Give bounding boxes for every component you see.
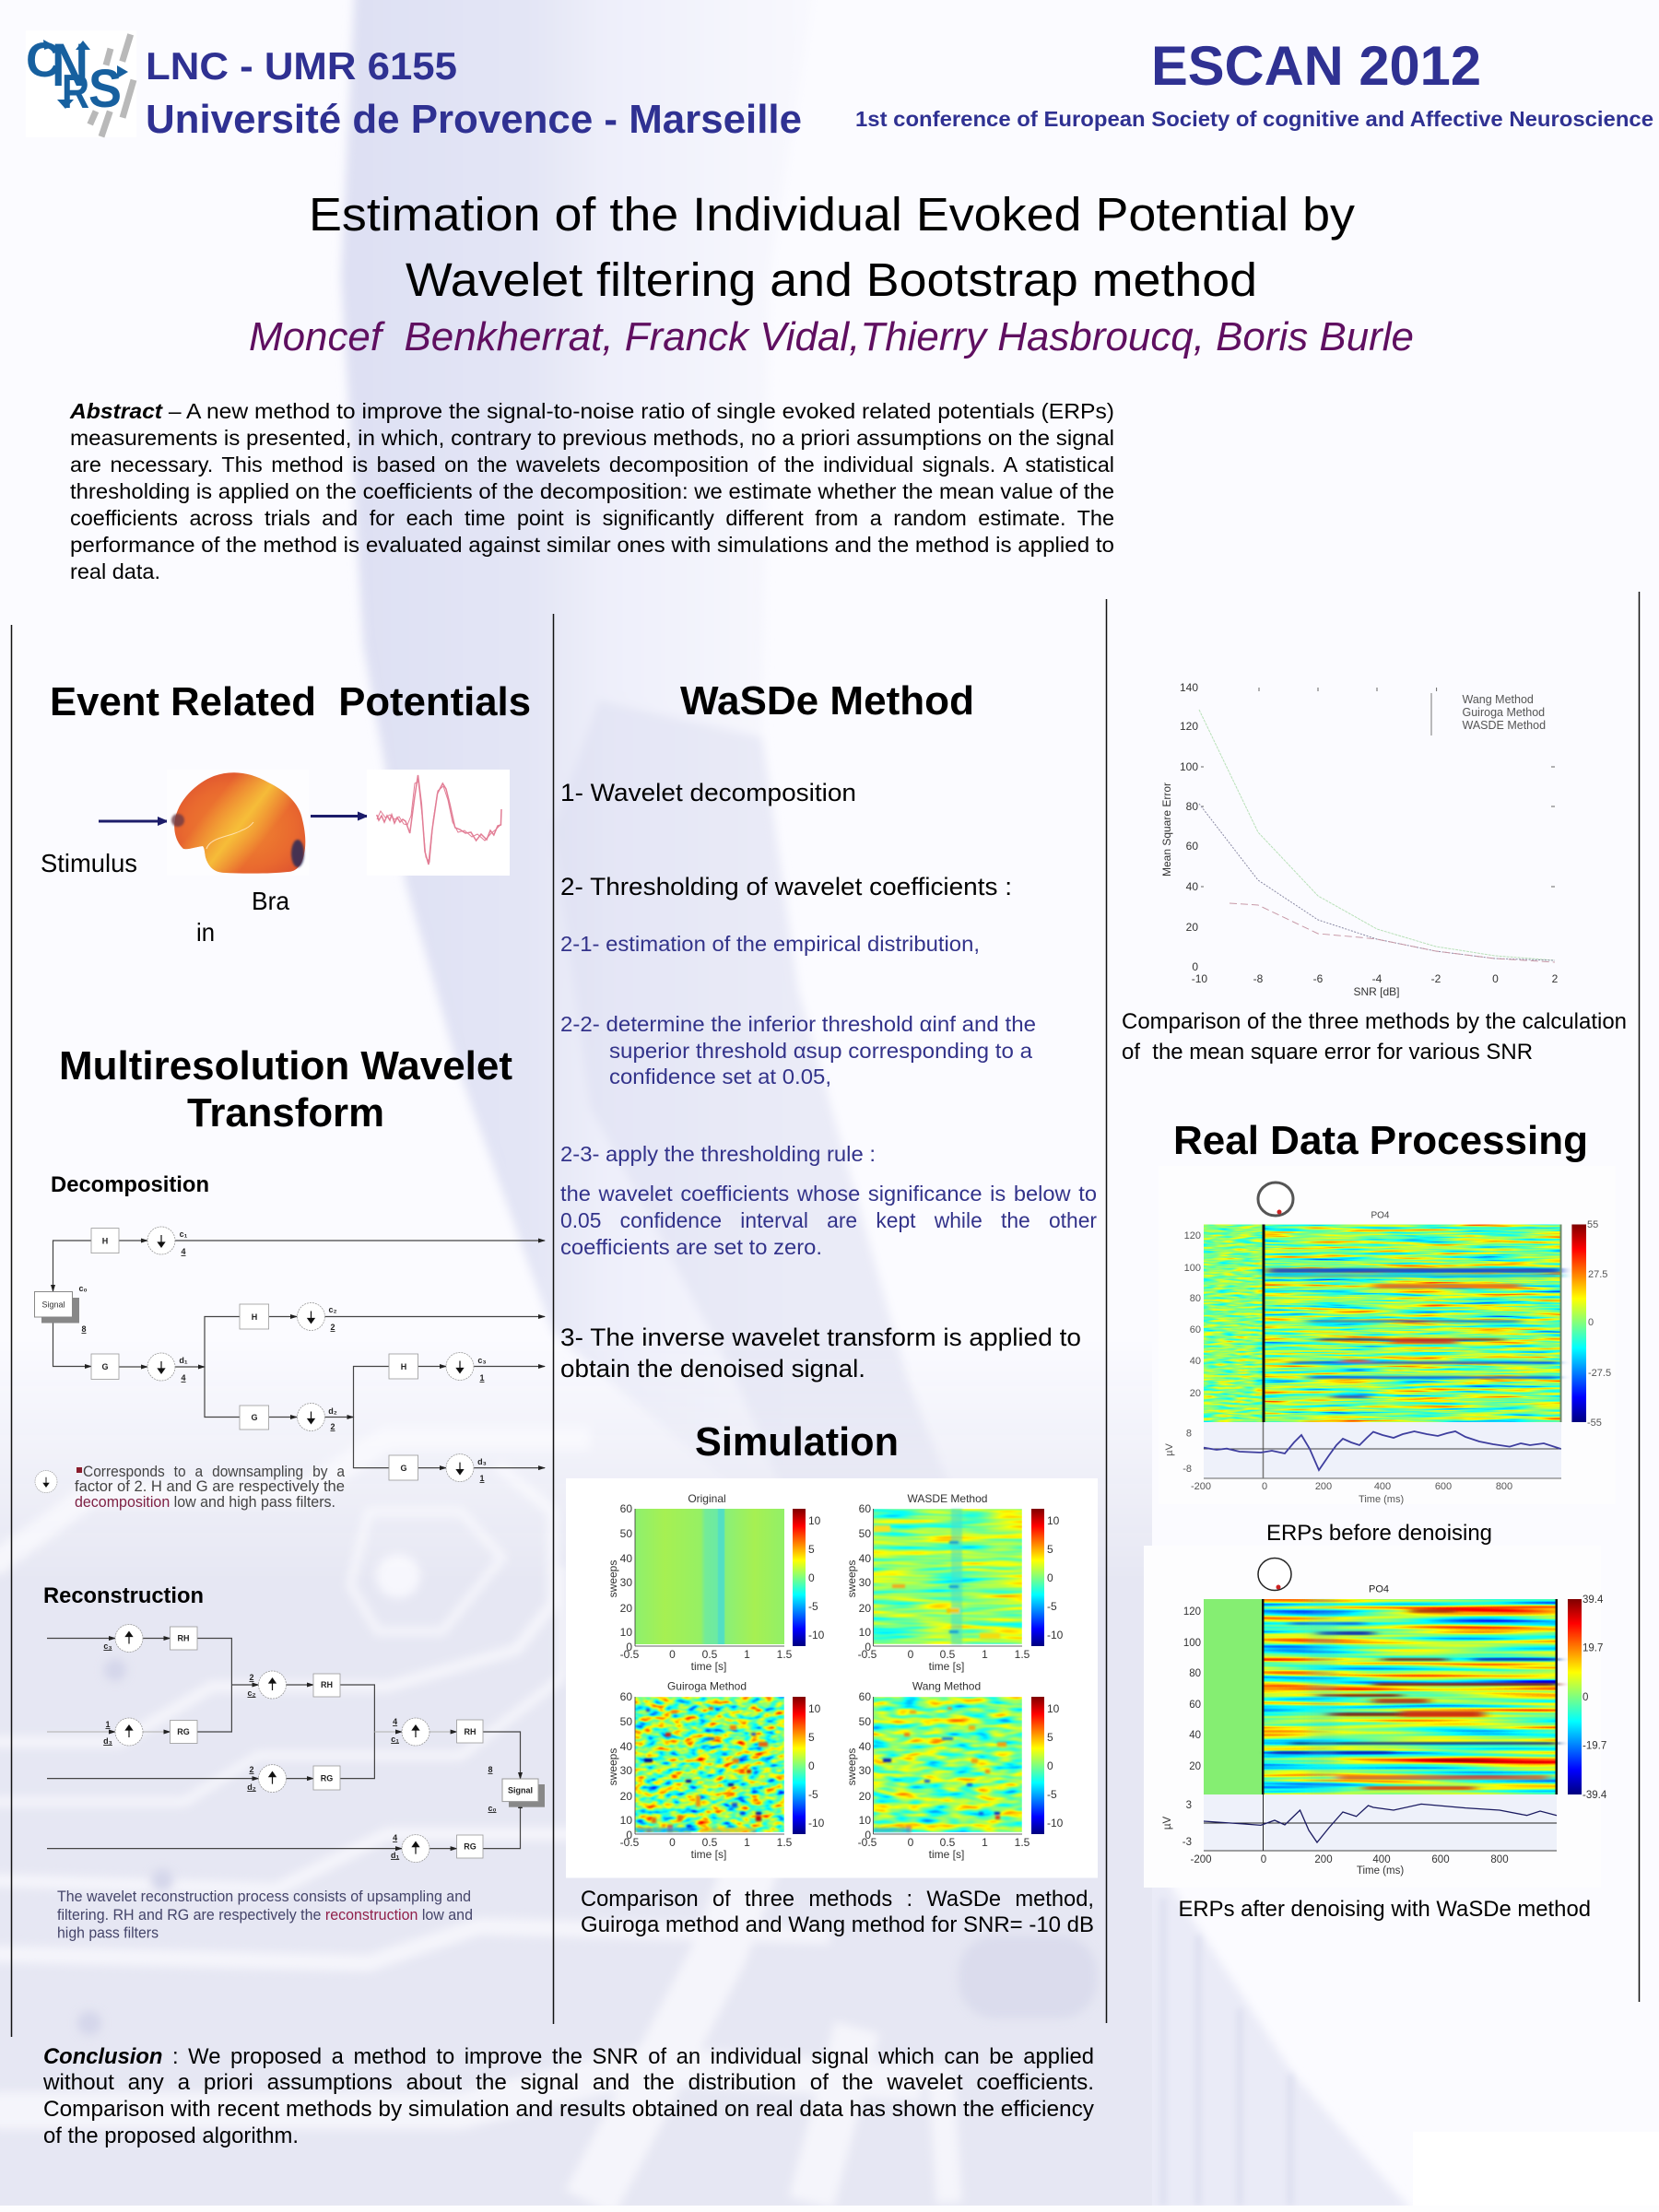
heatmap: guiroga method: 0 <box>626 1829 632 1841</box>
figure: ERPs after denoising: 200 <box>1314 1854 1333 1865</box>
header: CNRS logo: S <box>88 59 122 119</box>
figure: ERPs before denoising: 200 <box>1315 1481 1332 1492</box>
step 2-2: confidence set at 0.05, <box>609 1065 831 1088</box>
heatmap: wasde method: 50 <box>859 1527 871 1540</box>
heatmap: original: 0 <box>626 1641 632 1653</box>
label: stimulus: Stimulus <box>41 849 137 877</box>
conclusion: Conclusion : We proposed a method to improve the SNR of an individual signal which can be applied <box>43 2044 1094 2069</box>
heatmap: original: 0 <box>808 1571 815 1584</box>
diagram: wavelet reconstruction <box>47 1624 545 1863</box>
figure: ERPs before denoising: 600 <box>1435 1481 1452 1492</box>
heatmap: original: -5 <box>808 1600 818 1613</box>
heatmap: original: 60 <box>620 1502 632 1515</box>
figure: ERPs before denoising: 20 <box>1190 1388 1201 1399</box>
figure: ERPs before denoising: 55 <box>1587 1219 1598 1230</box>
heatmap: guiroga method: 10 <box>808 1702 821 1715</box>
diagram: wavelet decomposition: d₃ <box>477 1457 487 1466</box>
figure: ERPs before denoising <box>1159 1166 1616 1505</box>
heatmap: wasde method: time [s] <box>929 1660 964 1673</box>
diagram: wavelet decomposition: d₂ <box>328 1406 337 1416</box>
step 2-3: coefficients are set to zero. <box>560 1235 822 1259</box>
header: CNRS logo: N <box>52 30 88 99</box>
heatmap: original: -10 <box>808 1629 825 1641</box>
diagram: wavelet decomposition: 2 <box>330 1323 335 1332</box>
figure: ERPs after denoising: PO4 <box>1369 1584 1389 1595</box>
heatmap: wang method: -0.5 <box>858 1836 877 1849</box>
heatmap: original: 20 <box>620 1602 632 1615</box>
heatmap: wang method: time [s] <box>929 1848 964 1861</box>
line chart: mean square error vs SNR: -10 <box>1192 972 1207 985</box>
caption: before denoising: ERPs before denoising <box>1266 1521 1492 1546</box>
heatmap: wang method: 40 <box>859 1740 871 1753</box>
line chart: mean square error vs SNR: 80 <box>1186 800 1198 813</box>
line chart: mean square error vs SNR: 0 <box>1192 960 1198 973</box>
heatmap: original <box>606 1492 825 1673</box>
heatmap: wang method: 10 <box>1047 1702 1060 1715</box>
arrow: brain to waveform <box>311 815 367 818</box>
heatmap: original: 40 <box>620 1552 632 1565</box>
figure: ERPs before denoising: -27.5 <box>1588 1368 1611 1379</box>
heatmap: guiroga method: 0 <box>669 1836 676 1849</box>
abstract: performance of the method is evaluated against similar ones with simulations and the method is applied to <box>70 533 1114 557</box>
legend: Guiroga Method <box>1462 706 1545 719</box>
figure: ERPs before denoising: 40 <box>1190 1356 1201 1367</box>
heatmap: guiroga method: 30 <box>620 1764 632 1777</box>
diagram: wavelet reconstruction: RH <box>465 1727 476 1736</box>
figure: ERPs after denoising: 0 <box>1583 1692 1588 1703</box>
conclusion: without any a priori assumptions about the signal and the distribution of the wavelet coefficients. <box>42 2070 1094 2095</box>
heatmap: guiroga method <box>606 1679 825 1861</box>
step 2-2 <box>560 1012 1036 1088</box>
diagram: wavelet decomposition: 2 <box>330 1422 335 1431</box>
heatmap: guiroga method: 40 <box>620 1740 632 1753</box>
legend: downsampling note <box>35 1464 346 1511</box>
diagram: wavelet decomposition: H <box>102 1237 108 1246</box>
panel: event related potentials <box>41 679 531 947</box>
step 3: obtain the denoised signal. <box>560 1355 865 1382</box>
heading: simulation: Simulation <box>695 1419 899 1465</box>
abstract: thresholding is applied on the coefficients of the decomposition: we estimate whether the mean value of the <box>70 479 1114 503</box>
heatmap: guiroga method: 60 <box>620 1690 632 1703</box>
heatmap: wang method: -10 <box>1047 1817 1064 1830</box>
heatmap: wasde method: 60 <box>859 1502 871 1515</box>
heatmap: wasde method: 0.5 <box>940 1648 956 1661</box>
heatmap: guiroga method: 1.5 <box>777 1836 793 1849</box>
label: brain: Bra <box>252 887 289 915</box>
note: reconstruction process: filtering. RH and RG are respectively the reconstruction low and <box>57 1907 473 1924</box>
step 2-1: 2-1- estimation of the empirical distribution, <box>560 932 980 956</box>
line chart: mean square error vs SNR: 60 <box>1186 840 1198 853</box>
note: reconstruction process: The wavelet reconstruction process consists of upsampling and <box>57 1888 471 1905</box>
heatmap: wasde method: 10 <box>859 1626 871 1639</box>
heatmap: guiroga method: -10 <box>808 1817 825 1830</box>
figure: ERPs before denoising: 120 <box>1184 1230 1201 1241</box>
figure: ERPs after denoising: -200 <box>1190 1854 1212 1865</box>
figure: ERPs after denoising: 19.7 <box>1583 1643 1603 1654</box>
heatmap: guiroga method: 5 <box>808 1731 815 1744</box>
figure: ERPs after denoising: 80 <box>1189 1668 1201 1679</box>
diagram: wavelet reconstruction: d₂ <box>247 1783 256 1792</box>
heatmap: guiroga method: 10 <box>620 1814 632 1827</box>
step 3 <box>560 1324 1081 1382</box>
heatmap: original: 1 <box>744 1648 750 1661</box>
panel: multiresolution wavelet transform <box>35 1043 545 1941</box>
heatmap: guiroga method: -5 <box>808 1788 818 1801</box>
figure: ERPs before denoising: 0 <box>1588 1317 1594 1328</box>
figure: ERPs after denoising: Time (ms) <box>1357 1865 1404 1877</box>
figure: ERPs before denoising: 0 <box>1262 1481 1267 1492</box>
heatmap: wasde method: 30 <box>859 1576 871 1589</box>
header: conference <box>855 35 1653 131</box>
heatmap: guiroga method: 50 <box>620 1715 632 1728</box>
line chart: mean square error vs SNR: 20 <box>1186 921 1198 934</box>
line chart: mean square error vs SNR: 0 <box>1492 972 1499 985</box>
note: reconstruction process: high pass filters <box>57 1924 159 1941</box>
heatmap: wang method: 60 <box>859 1690 871 1703</box>
heatmap: guiroga method: 20 <box>620 1790 632 1803</box>
subheading: decomposition: Decomposition <box>51 1172 209 1197</box>
line chart: mean square error vs SNR <box>1160 681 1559 998</box>
figure: ERPs after denoising: 20 <box>1189 1761 1201 1772</box>
header: CNRS logo <box>26 30 136 137</box>
heatmap: original: 10 <box>620 1626 632 1639</box>
heading: wasde method: WaSDe Method <box>680 678 974 724</box>
heatmap: wang method: sweeps <box>845 1748 858 1785</box>
figure: ERPs after denoising: -39.4 <box>1583 1790 1607 1801</box>
panel: mean square error chart <box>1122 681 1627 1065</box>
caption: comparison of three methods <box>581 1887 1094 1937</box>
figure: ERPs after denoising: 0 <box>1261 1854 1266 1865</box>
diagram: wavelet decomposition: Signal <box>41 1300 65 1309</box>
header: laboratory name: Université de Provence - Marseille <box>146 97 802 142</box>
image: brain topography <box>167 770 309 876</box>
heatmap: wasde method: 1 <box>982 1648 988 1661</box>
heatmap: wasde method: 20 <box>859 1602 871 1615</box>
heatmap: guiroga method: 0 <box>808 1759 815 1772</box>
diagram: wavelet reconstruction: 4 <box>393 1717 397 1726</box>
heatmap: wang method: 0.5 <box>940 1836 956 1849</box>
heatmap: wang method: Wang Method <box>912 1679 981 1692</box>
diagram: wavelet reconstruction: d₃ <box>103 1736 112 1746</box>
line chart: mean square error vs SNR: SNR [dB] <box>1353 985 1400 998</box>
heatmap: wasde method: 1.5 <box>1015 1648 1030 1661</box>
heatmap: wang method: 0 <box>908 1836 914 1849</box>
chart: evoked waveform <box>367 770 510 876</box>
diagram: wavelet decomposition: c₃ <box>477 1356 487 1365</box>
heatmap: wasde method: -5 <box>1047 1600 1057 1613</box>
heatmap: wang method: 20 <box>859 1790 871 1803</box>
figure: ERPs after denoising: µV <box>1162 1817 1173 1830</box>
conclusion: Comparison with recent methods by simulation and results obtained on real data has shown the efficiency <box>43 2097 1094 2122</box>
step 2-2: 2-2- determine the inferior threshold αinf and the <box>560 1012 1036 1036</box>
heatmap: wasde method: 0 <box>1047 1571 1053 1584</box>
header: CNRS logo: C <box>26 33 61 88</box>
figure: ERPs after denoising: 39.4 <box>1583 1594 1604 1606</box>
figure: ERPs before denoising: 8 <box>1186 1429 1192 1440</box>
heatmap: original: 1.5 <box>777 1648 793 1661</box>
legend: Wang Method <box>1462 693 1534 706</box>
figure: ERPs before denoising: -8 <box>1182 1464 1192 1475</box>
header: conference: 1st conference of European Society of cognitive and Affective Neuroscience <box>855 107 1653 131</box>
header: laboratory name <box>146 44 802 142</box>
panel: real data processing <box>1144 1118 1616 1922</box>
diagram: wavelet decomposition: G <box>101 1362 109 1371</box>
diagram: wavelet decomposition: c₀ <box>78 1284 88 1293</box>
caption: comparison of three methods: Comparison of three methods : WaSDe method, <box>581 1887 1094 1912</box>
note: reconstruction process <box>57 1888 473 1941</box>
figure: ERPs before denoising: 60 <box>1190 1324 1201 1335</box>
header: CNRS logo: R <box>62 65 89 119</box>
caption: after denoising: ERPs after denoising with WaSDe method <box>1178 1897 1591 1922</box>
conclusion <box>42 2044 1094 2148</box>
figure: ERPs after denoising: 800 <box>1490 1854 1509 1865</box>
abstract: real data. <box>70 559 160 583</box>
heatmap: original: 0 <box>669 1648 676 1661</box>
figure: ERPs after denoising: 400 <box>1372 1854 1391 1865</box>
figure: ERPs before denoising: 800 <box>1496 1481 1512 1492</box>
heatmap: original: 5 <box>808 1543 815 1556</box>
column divider: middle left <box>553 614 555 2024</box>
heatmap: original: 30 <box>620 1576 632 1589</box>
diagram: wavelet reconstruction: 1 <box>105 1720 111 1729</box>
legend: WASDE Method <box>1462 719 1546 732</box>
heading: multiresolution wavelet transform <box>59 1043 512 1135</box>
step 2-3 <box>560 1142 1097 1259</box>
figure: ERPs before denoising: 100 <box>1184 1263 1201 1274</box>
line chart: mean square error vs SNR: 2 <box>1552 972 1559 985</box>
diagram: wavelet decomposition: 1 <box>479 1373 485 1382</box>
heatmap: guiroga method: sweeps <box>606 1748 619 1785</box>
label: brain: in <box>196 918 215 947</box>
heatmap: original: 50 <box>620 1527 632 1540</box>
abstract: coefficients across trials and for each time point is significantly different from a random estimate. The <box>70 506 1114 530</box>
line chart: mean square error vs SNR: -4 <box>1372 972 1382 985</box>
step 2: 2- Thresholding of wavelet coefficients : <box>560 873 1012 900</box>
diagram: wavelet reconstruction: c₂ <box>247 1688 256 1698</box>
heatmap: guiroga method: time [s] <box>691 1848 726 1861</box>
diagram: wavelet decomposition: 4 <box>181 1373 186 1382</box>
diagram: wavelet reconstruction: 4 <box>393 1833 397 1842</box>
diagram: wavelet reconstruction: c₃ <box>103 1641 112 1651</box>
step 1: 1- Wavelet decomposition <box>560 779 856 806</box>
legend <box>1431 693 1546 735</box>
diagram: wavelet reconstruction: RH <box>321 1680 333 1689</box>
heatmap: wasde method: 40 <box>859 1552 871 1565</box>
figure: ERPs after denoising: 60 <box>1189 1700 1201 1711</box>
figure: ERPs before denoising: -55 <box>1587 1418 1602 1429</box>
diagram: wavelet decomposition: 4 <box>181 1247 186 1256</box>
diagram: wavelet decomposition: c₁ <box>180 1230 188 1239</box>
diagram: wavelet reconstruction: c₀ <box>488 1804 497 1813</box>
heatmap: wang method: 30 <box>859 1764 871 1777</box>
heading: event related potentials: Event Related Potentials <box>50 679 531 724</box>
heatmap: wasde method: -10 <box>1047 1629 1064 1641</box>
conclusion: of the proposed algorithm. <box>43 2124 299 2148</box>
heading: real data processing: Real Data Processing <box>1173 1118 1588 1163</box>
step 2-3: 2-3- apply the thresholding rule : <box>560 1142 876 1166</box>
abstract: measurements is presented, in which, contrary to previous methods, no a priori assumptions on the signal <box>70 426 1114 450</box>
step 2-3: 0.05 confidence interval are kept while the other <box>560 1208 1097 1232</box>
line chart: mean square error vs SNR: -2 <box>1431 972 1441 985</box>
heatmap: wasde method: 5 <box>1047 1543 1053 1556</box>
abstract: are necessary. This method is based on the wavelets decomposition of the individual signals. A statistical <box>70 453 1114 477</box>
figure: ERPs before denoising: µV <box>1164 1443 1175 1456</box>
line chart: mean square error vs SNR: -8 <box>1253 972 1264 985</box>
diagram: wavelet decomposition: c₂ <box>328 1305 337 1314</box>
step 2-2: superior threshold αsup corresponding to a <box>609 1039 1032 1063</box>
abstract: Abstract – A new method to improve the signal-to-noise ratio of single evoked related potentials (ERPs) <box>69 399 1114 423</box>
heatmap: wasde method: 0 <box>865 1641 871 1653</box>
heatmap: wang method: 5 <box>1047 1731 1053 1744</box>
line chart: mean square error vs SNR: 100 <box>1180 760 1198 773</box>
heatmap: wang method: 1.5 <box>1015 1836 1030 1849</box>
label: brain <box>196 887 289 947</box>
column divider: middle right <box>1106 599 1108 2023</box>
heading: multiresolution wavelet transform: Multiresolution Wavelet <box>59 1043 512 1088</box>
diagram: wavelet reconstruction: RG <box>464 1841 477 1851</box>
heatmap: original: sweeps <box>606 1560 619 1597</box>
diagram: wavelet decomposition: 8 <box>81 1324 87 1334</box>
diagram: wavelet decomposition: H <box>252 1312 257 1322</box>
figure: ERPs before denoising: PO4 <box>1371 1211 1390 1221</box>
heatmap: wasde method: 0 <box>908 1648 914 1661</box>
diagram: wavelet reconstruction: 2 <box>249 1765 254 1774</box>
figure: ERPs after denoising: -19.7 <box>1583 1741 1606 1752</box>
heatmap: original: 10 <box>808 1514 821 1527</box>
step 2-3: the wavelet coefficients whose significance is below to <box>560 1182 1097 1206</box>
heatmap: wang method: 0 <box>865 1829 871 1841</box>
figure: ERPs after denoising: 600 <box>1431 1854 1450 1865</box>
arrow: stimulus to brain <box>99 820 167 822</box>
heading: multiresolution wavelet transform: Transform <box>187 1090 384 1135</box>
diagram: wavelet decomposition: d₁ <box>179 1356 188 1365</box>
heatmap: wasde method: -0.5 <box>858 1648 877 1661</box>
heatmap: guiroga method: 0.5 <box>702 1836 718 1849</box>
title: Estimation of the Individual Evoked Potential by <box>309 188 1356 241</box>
heatmap: wasde method: sweeps <box>845 1560 858 1597</box>
line chart: mean square error vs SNR: Mean Square Error <box>1160 782 1173 877</box>
diagram: wavelet reconstruction: RG <box>177 1727 190 1736</box>
header: laboratory name: LNC - UMR 6155 <box>146 44 457 88</box>
heatmap: wang method: 1 <box>982 1836 988 1849</box>
diagram: wavelet reconstruction: 2 <box>249 1673 254 1682</box>
heatmap: original: 0.5 <box>702 1648 718 1661</box>
line chart: mean square error vs SNR: 140 <box>1180 681 1198 694</box>
diagram: wavelet decomposition: H <box>401 1362 406 1371</box>
figure: ERPs before denoising: -200 <box>1191 1481 1211 1492</box>
diagram: wavelet decomposition <box>35 1227 545 1483</box>
heatmap: wasde method: WASDE Method <box>908 1492 987 1505</box>
column divider: left <box>11 625 13 2037</box>
heatmap: wasde method: 10 <box>1047 1514 1060 1527</box>
line chart: mean square error vs SNR: -6 <box>1313 972 1324 985</box>
heatmap: original: -0.5 <box>620 1648 640 1661</box>
figure: ERPs after denoising: -3 <box>1182 1837 1192 1848</box>
caption: mean square error: of the mean square error for various SNR <box>1122 1040 1533 1065</box>
authors: Moncef Benkherrat, Franck Vidal,Thierry Hasbroucq, Boris Burle <box>249 314 1414 359</box>
heatmap: wang method: -5 <box>1047 1788 1057 1801</box>
line chart: mean square error vs SNR: 40 <box>1186 880 1198 893</box>
diagram: wavelet reconstruction: 8 <box>488 1765 493 1774</box>
caption: mean square error: Comparison of the three methods by the calculation <box>1122 1009 1627 1034</box>
heatmap: wasde method <box>845 1492 1064 1673</box>
diagram: wavelet reconstruction: RG <box>321 1773 333 1783</box>
title <box>309 188 1356 306</box>
figure: ERPs before denoising: 400 <box>1374 1481 1391 1492</box>
figure background <box>566 1478 1098 1878</box>
figure: ERPs before denoising: 80 <box>1190 1293 1201 1304</box>
diagram: wavelet reconstruction: RH <box>177 1633 190 1642</box>
figure: ERPs before denoising: 27.5 <box>1588 1269 1607 1280</box>
diagram: wavelet decomposition: G <box>251 1413 258 1422</box>
heatmap: wang method <box>845 1679 1064 1861</box>
legend: downsampling note: factor of 2. H and G are respectively the <box>75 1478 345 1495</box>
figure: ERPs after denoising: 100 <box>1183 1638 1201 1649</box>
subheading: reconstruction: Reconstruction <box>43 1583 204 1608</box>
heatmap: guiroga method: 1 <box>744 1836 750 1849</box>
figure: ERPs after denoising: 120 <box>1183 1606 1201 1618</box>
diagram: wavelet decomposition: 1 <box>479 1474 485 1483</box>
header: conference: ESCAN 2012 <box>1151 35 1481 97</box>
panel: simulation <box>566 1419 1098 1937</box>
diagram: wavelet reconstruction: c₁ <box>391 1735 399 1744</box>
caption: mean square error <box>1122 1009 1627 1065</box>
step 3: 3- The inverse wavelet transform is applied to <box>560 1324 1081 1351</box>
heatmap: wang method: 0 <box>1047 1759 1053 1772</box>
figure: ERPs before denoising: Time (ms) <box>1359 1494 1404 1505</box>
line chart: mean square error vs SNR: 120 <box>1180 720 1198 733</box>
figure: ERPs after denoising: 3 <box>1186 1800 1192 1811</box>
legend: downsampling note: decomposition low and high pass filters. <box>75 1494 335 1511</box>
heatmap: guiroga method: -0.5 <box>620 1836 640 1849</box>
abstract <box>69 399 1114 583</box>
caption: comparison of three methods: Guiroga method and Wang method for SNR= -10 dB <box>581 1912 1094 1937</box>
legend: downsampling note: Corresponds to a downsampling by a <box>83 1464 346 1480</box>
panel: wasde method <box>560 678 1097 1382</box>
diagram: wavelet decomposition: G <box>400 1464 407 1473</box>
column divider: right <box>1639 592 1641 2002</box>
heatmap: guiroga method: Guiroga Method <box>667 1679 747 1692</box>
figure: ERPs after denoising <box>1144 1546 1607 1888</box>
heatmap: wang method: 10 <box>859 1814 871 1827</box>
heatmap: wang method: 50 <box>859 1715 871 1728</box>
heatmap: original: Original <box>688 1492 726 1505</box>
figure: ERPs after denoising: 40 <box>1189 1730 1201 1741</box>
diagram: wavelet reconstruction: d₁ <box>391 1851 399 1860</box>
title: Wavelet filtering and Bootstrap method <box>406 253 1257 306</box>
diagram: wavelet reconstruction: Signal <box>508 1786 533 1795</box>
heatmap: original: time [s] <box>691 1660 726 1673</box>
